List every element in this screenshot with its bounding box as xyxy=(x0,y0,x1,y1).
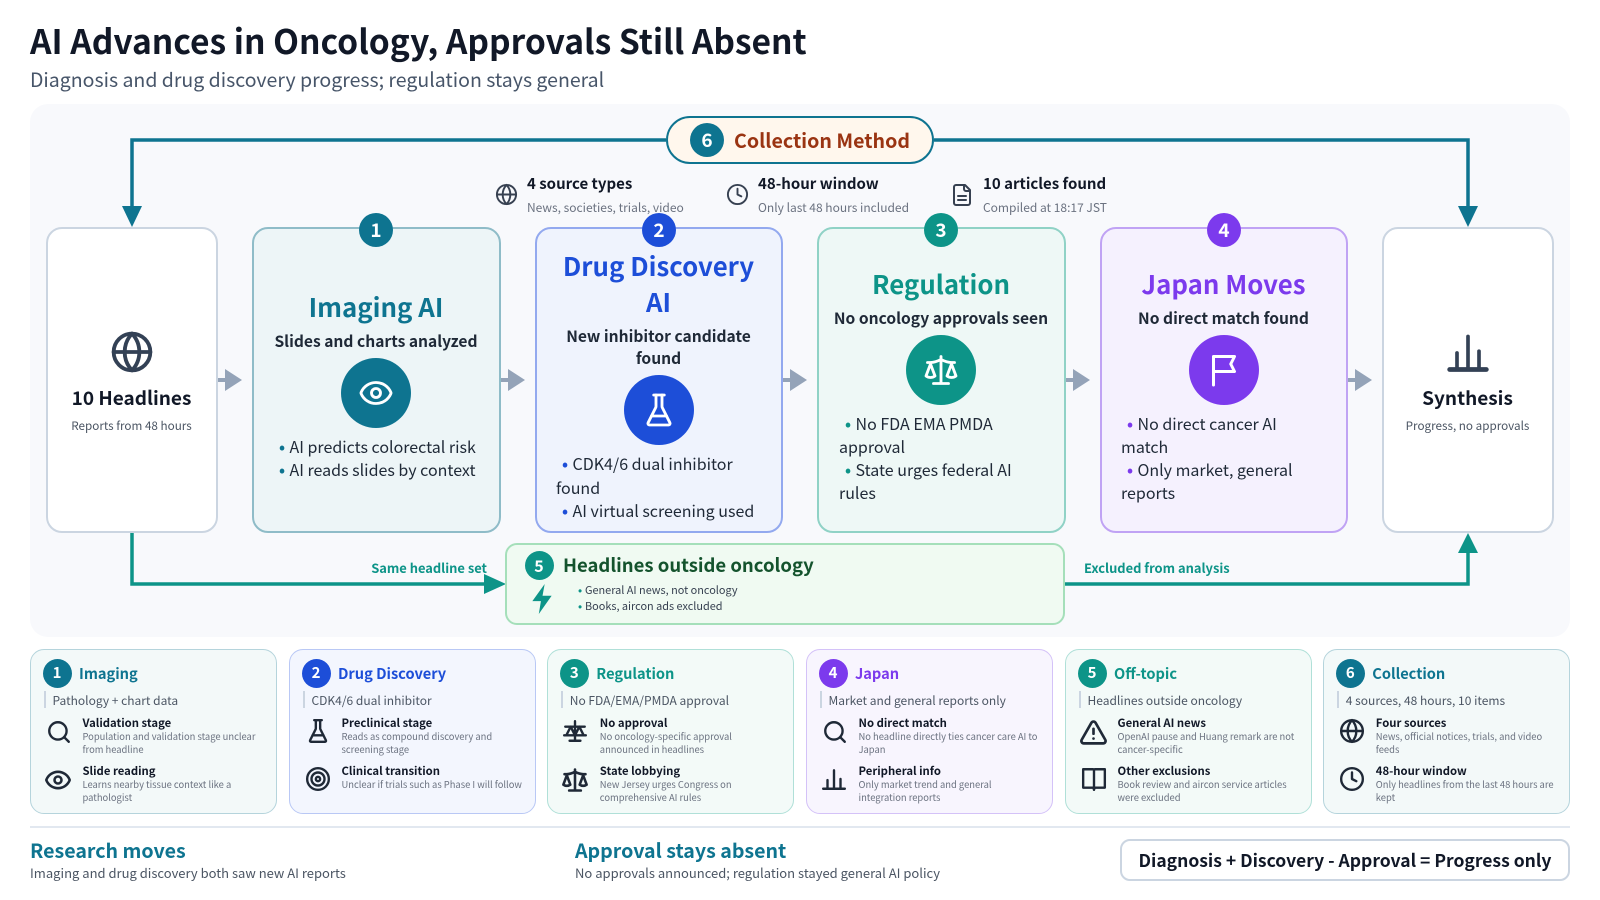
badge 4 xyxy=(1207,213,1241,247)
card 4: japan moves: Only market, general xyxy=(1138,457,1293,481)
lower card 3: regulation: 3 xyxy=(570,662,579,683)
lower card 2: drug discovery: screening stage xyxy=(342,742,409,756)
footer: approval stays absent xyxy=(574,835,940,882)
lower card 3: regulation: No approval xyxy=(600,715,667,731)
lower card 6: collection: Four sources xyxy=(1376,715,1446,731)
lower card 2: drug discovery: 2 xyxy=(312,662,320,683)
label: same headline set: Same headline set xyxy=(371,558,487,577)
card 1: imaging AI: Slides and charts analyzed xyxy=(274,330,478,352)
meta: source types: 4 source types xyxy=(527,173,632,194)
lower card 6: collection xyxy=(1323,649,1570,814)
card 3: regulation: rules xyxy=(839,480,876,504)
lower card 4: japan: Market and general reports only xyxy=(828,692,1006,709)
lower card 2: drug discovery xyxy=(289,649,536,814)
card 4: japan moves: Japan Moves xyxy=(1141,265,1306,302)
lower card 2: drug discovery: CDK4/6 dual inhibitor xyxy=(312,692,432,709)
lower card 5: off-topic: OpenAI pause and Huang remark are not xyxy=(1118,729,1294,743)
lower card 2: drug discovery: Preclinical stage xyxy=(342,715,432,731)
card 2: drug discovery: Drug Discovery xyxy=(563,247,754,284)
card 2: drug discovery xyxy=(535,227,783,533)
box 5: headlines outside oncology: 5 xyxy=(534,553,544,577)
lower card 5: off-topic xyxy=(1065,649,1312,814)
lower card 1: imaging: Slide reading xyxy=(82,763,156,779)
lower card 4: japan: integration reports xyxy=(858,790,940,804)
footer: approval stays absent: No approvals announced; regulation stayed general AI policy xyxy=(575,863,940,882)
card 1: imaging AI: AI predicts colorectal risk xyxy=(290,434,476,458)
lower card 3: regulation: No FDA/EMA/PMDA approval xyxy=(570,692,729,709)
card: 10 headlines: Reports from 48 hours xyxy=(71,417,192,434)
lower card 6: collection: Collection xyxy=(1372,663,1445,684)
lower card 1: imaging: from headline xyxy=(82,742,144,756)
badge 6 xyxy=(690,123,724,157)
lower card 6: collection: 6 xyxy=(1346,662,1355,683)
footer: research moves: Research moves xyxy=(30,835,186,864)
badge 6: 6 xyxy=(701,126,713,153)
card 2: drug discovery: • xyxy=(562,451,568,475)
lower card 5: off-topic: cancer-specific xyxy=(1118,742,1183,756)
lower card 3: regulation: Regulation xyxy=(596,663,674,684)
meta: articles xyxy=(953,173,1107,216)
card 4: japan moves: No direct cancer AI xyxy=(1138,411,1277,435)
card 3: regulation: Regulation xyxy=(872,265,1010,302)
card 1: imaging AI: • xyxy=(279,434,285,458)
box 5: headlines outside oncology: Headlines outside oncology xyxy=(563,552,814,578)
card 2: drug discovery: found xyxy=(556,474,600,498)
lower card 3: regulation: New Jersey urges Congress on xyxy=(600,777,732,791)
lower card 5: off-topic: Off-topic xyxy=(1114,663,1177,684)
subtitle: Diagnosis and drug discovery progress; regulation stays general xyxy=(30,64,604,93)
lower card 1: imaging: pathologist xyxy=(82,790,132,804)
card 3: regulation: No oncology approvals seen xyxy=(834,307,1048,329)
meta: source types: News, societies, trials, video xyxy=(527,199,684,216)
lower card 2: drug discovery: Clinical transition xyxy=(342,763,440,779)
pill label: Collection Method xyxy=(734,125,910,154)
card 3: regulation: No FDA EMA PMDA xyxy=(856,411,993,435)
equation box: Diagnosis + Discovery - Approval = Progress only xyxy=(1139,848,1551,873)
footer: research moves: Imaging and drug discovery both saw new AI reports xyxy=(30,863,346,882)
label: excluded: Excluded from analysis xyxy=(1084,558,1230,577)
lower card 4: japan: Japan xyxy=(858,742,885,756)
box 5: headlines outside oncology: • xyxy=(578,582,582,598)
lower card 4: japan: Only market trend and general xyxy=(858,777,992,791)
card: 10 headlines: 10 Headlines xyxy=(72,384,191,411)
meta: source types xyxy=(496,173,684,216)
badge 2: 2 xyxy=(653,216,665,243)
lower card 3: regulation: announced in headlines xyxy=(600,742,704,756)
equation box xyxy=(1120,839,1570,881)
meta: articles: Compiled at 18:17 JST xyxy=(983,199,1107,216)
lower card 5: off-topic: were excluded xyxy=(1118,790,1181,804)
card 2: drug discovery: AI virtual screening used xyxy=(572,498,754,522)
card 2: drug discovery: • xyxy=(562,498,568,522)
lower card 6: collection: feeds xyxy=(1376,742,1399,756)
lower card 1: imaging: Pathology + chart data xyxy=(52,692,178,709)
lower card 5: off-topic: 5 xyxy=(1088,662,1096,683)
lower card 6: collection: Only headlines from the last 48 hours are xyxy=(1376,777,1554,791)
lower card 5: off-topic: General AI news xyxy=(1118,715,1206,731)
lower card 5: off-topic: Book review and aircon service articles xyxy=(1118,777,1287,791)
lower card 3: regulation xyxy=(547,649,794,814)
card 3: regulation: • xyxy=(845,457,851,481)
lower card 1: imaging xyxy=(30,649,277,814)
lower card 3: regulation: comprehensive AI rules xyxy=(600,790,701,804)
lower card 1: imaging: Validation stage xyxy=(82,715,171,731)
card 2: drug discovery: CDK4/6 dual inhibitor xyxy=(572,451,733,475)
box 5: headlines outside oncology: • xyxy=(578,598,582,614)
card 3: regulation: • xyxy=(845,411,851,435)
card 2: drug discovery: found xyxy=(636,347,681,369)
lower card 2: drug discovery: Unclear if trials such as Phase I will follow xyxy=(342,777,522,791)
badge 1: 1 xyxy=(370,216,382,243)
badge 1 xyxy=(359,213,393,247)
card 4: japan moves xyxy=(1100,227,1348,533)
lower card 2: drug discovery: Reads as compound discovery and xyxy=(342,729,492,743)
card 3: regulation: approval xyxy=(839,434,905,458)
lower card 3: regulation: State lobbying xyxy=(600,763,680,779)
card 3: regulation: State urges federal AI xyxy=(856,457,1012,481)
lower card 1: imaging: Imaging xyxy=(79,663,138,684)
lower card 6: collection: kept xyxy=(1376,790,1395,804)
lower card 6: collection: 48-hour window xyxy=(1376,763,1467,779)
card 4: japan moves: • xyxy=(1127,411,1133,435)
card 1: imaging AI: AI reads slides by context xyxy=(290,457,476,481)
card: 10 headlines xyxy=(46,227,218,533)
lower card 4: japan: Peripheral info xyxy=(858,763,941,779)
footer: research moves xyxy=(30,835,346,882)
footer: approval stays absent: Approval stays absent xyxy=(575,835,786,864)
lower card 6: collection: News, official notices, trials, and video xyxy=(1376,729,1542,743)
box 5: headlines outside oncology: Books, aircon ads excluded xyxy=(585,598,723,614)
pill: collection method xyxy=(666,116,934,164)
meta: window xyxy=(726,173,909,216)
card: synthesis: Progress, no approvals xyxy=(1406,417,1529,434)
lower card 1: imaging: Population and validation stage unclear xyxy=(82,729,255,743)
card 4: japan moves: match xyxy=(1121,434,1168,458)
card: synthesis: Synthesis xyxy=(1422,384,1513,411)
card 4: japan moves: No direct match found xyxy=(1138,307,1309,329)
lower card 4: japan: Japan xyxy=(855,663,899,684)
card: synthesis xyxy=(1382,227,1554,533)
lower card 4: japan xyxy=(806,649,1053,814)
card 3: regulation xyxy=(817,227,1066,533)
meta: window: Only last 48 hours included xyxy=(758,199,909,216)
card 4: japan moves: • xyxy=(1127,457,1133,481)
lower card 4: japan: No direct match xyxy=(858,715,947,731)
lower card 4: japan: No headline directly ties cancer care AI to xyxy=(858,729,1037,743)
lower card 5: off-topic: Other exclusions xyxy=(1118,763,1210,779)
lower card 6: collection: 4 sources, 48 hours, 10 items xyxy=(1346,692,1505,709)
badge 2 xyxy=(642,213,676,247)
box 5: headlines outside oncology xyxy=(505,543,1065,625)
panel: main flow xyxy=(30,104,1570,637)
lower card 1: imaging: 1 xyxy=(53,662,61,683)
badge 3: 3 xyxy=(935,216,947,243)
box 5: headlines outside oncology: General AI news, not oncology xyxy=(585,582,738,598)
card 2: drug discovery: New inhibitor candidate xyxy=(566,325,751,347)
card 1: imaging AI: • xyxy=(279,457,285,481)
lower card 4: japan: 4 xyxy=(829,662,837,683)
card 4: japan moves: reports xyxy=(1121,480,1175,504)
meta: window: 48-hour window xyxy=(758,173,879,194)
badge 4: 4 xyxy=(1218,216,1230,243)
title: AI Advances in Oncology, Approvals Still Absent xyxy=(30,15,807,64)
badge 3 xyxy=(924,213,958,247)
lower card 3: regulation: No oncology-specific approval xyxy=(600,729,732,743)
meta: articles: 10 articles found xyxy=(983,173,1106,194)
lower card 1: imaging: Learns nearby tissue context like a xyxy=(82,777,231,791)
card 2: drug discovery: AI xyxy=(646,283,671,320)
card 1: imaging AI xyxy=(252,227,501,533)
lower card 2: drug discovery: Drug Discovery xyxy=(338,663,446,684)
lower card 5: off-topic: Headlines outside oncology xyxy=(1088,692,1242,709)
card 1: imaging AI: Imaging AI xyxy=(309,288,443,325)
